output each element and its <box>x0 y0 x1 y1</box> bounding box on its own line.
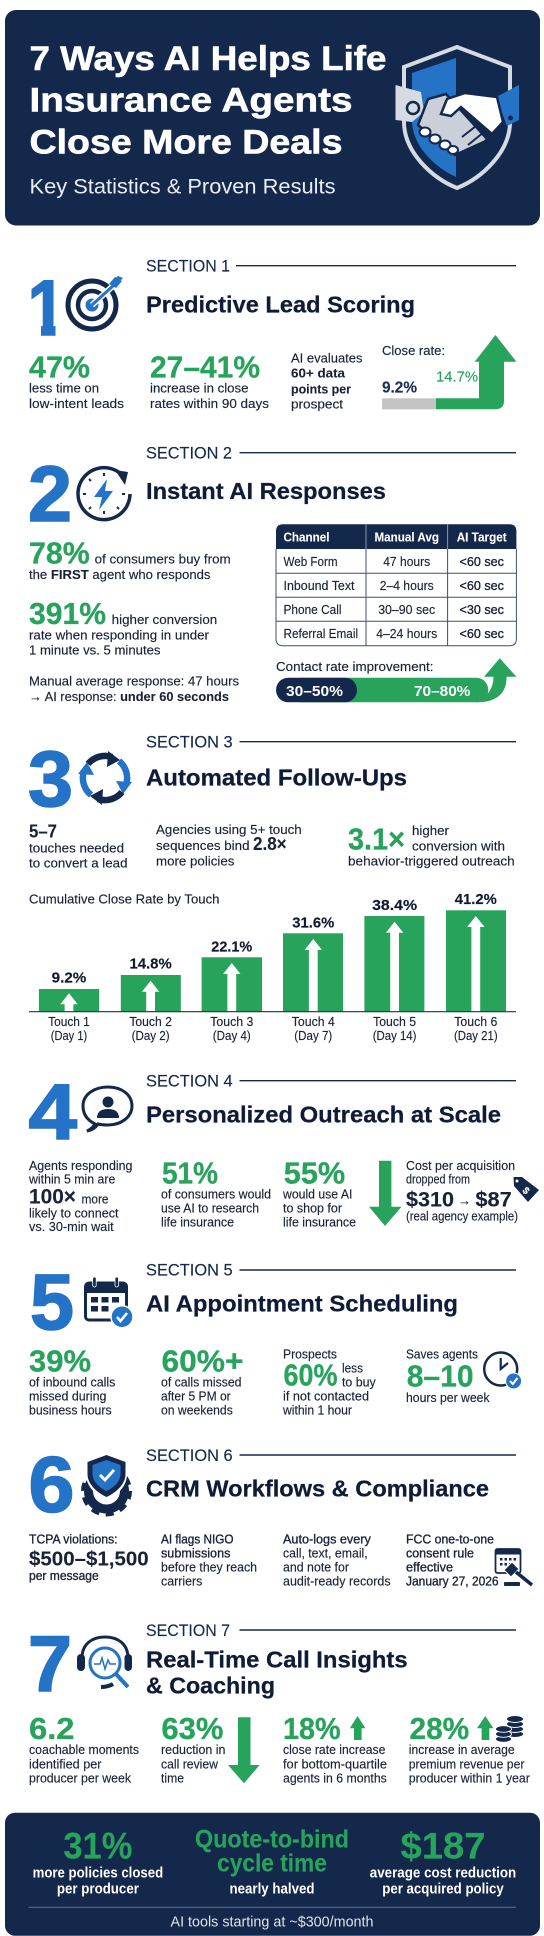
stat: data points: prospect <box>291 397 343 412</box>
section 5: AI appointment scheduling <box>29 1257 522 1418</box>
stat: 100x <box>28 1158 132 1234</box>
section 2: instant AI responses <box>28 443 516 704</box>
icon: calendar and gavel <box>496 1549 532 1586</box>
stat: 3.1x conversion <box>348 821 515 869</box>
stat: 47%: low-intent leads <box>29 396 124 411</box>
icon: headset with magnifier <box>77 1637 132 1687</box>
icon: coin stacks <box>496 1716 524 1742</box>
stat: $187: average cost reduction <box>370 1865 516 1881</box>
stat: 60% less: 60% <box>284 1358 338 1393</box>
text: FCC rule: effective <box>406 1559 453 1574</box>
stat: 391%: rate when responding in under <box>29 627 210 642</box>
bar chart: cumulative close rate by touch: Touch 1 <box>48 1014 90 1029</box>
stat: 51%: of consumers would <box>161 1187 271 1202</box>
stat: 27-41%: rates within 90 days <box>150 396 269 411</box>
stat: cost per acquisition <box>406 1158 518 1224</box>
bar chart: cumulative close rate by touch: (Day 4) <box>213 1028 251 1043</box>
stat: 60%+: 60%+ <box>162 1344 244 1379</box>
stat: 28%: 28% <box>410 1711 469 1746</box>
stat: 51%: life insurance <box>161 1214 234 1229</box>
stat: 391%: 1 minute vs. 5 minutes <box>29 643 161 658</box>
table: channel response times: AI Target <box>457 530 507 545</box>
stat: TCPA violations: $500–$1,500 <box>29 1549 149 1571</box>
heading: Personalized Outreach at Scale <box>146 1102 501 1128</box>
table: channel response times: <60 sec <box>460 626 504 641</box>
stat: 55%: 55% <box>284 1155 345 1190</box>
heading: AI Appointment Scheduling <box>146 1291 458 1317</box>
stat: 60%+: of calls missed <box>161 1375 242 1390</box>
stat: 100x: more <box>82 1191 108 1206</box>
table: channel response times: Channel <box>284 530 330 545</box>
stat: 391%: 391% <box>29 596 106 631</box>
stat: 39%: of inbound calls <box>29 1375 116 1390</box>
text: NIGO flags: AI flags NIGO <box>161 1531 234 1546</box>
section number: 4 <box>28 1067 77 1156</box>
stat: 60% less: if not contacted <box>283 1389 369 1404</box>
stat: 2.8x policies: Agencies using 5+ touch <box>156 822 302 837</box>
stat: 2.8x policies: 2.8× <box>253 834 287 854</box>
icon: price tag: $ <box>520 1185 532 1197</box>
stat: 78%: of consumers buy from <box>95 551 231 566</box>
table: channel response times: <30 sec <box>460 602 504 617</box>
stat: 3.1x conversion: behavior-triggered outreach <box>348 854 515 869</box>
section 7: real-time call insights and coaching <box>28 1619 530 1786</box>
stat: cost per acquisition: → <box>458 1193 471 1208</box>
chart: contact rate improvement: Contact rate improvement: <box>276 659 434 674</box>
stat: TCPA violations: TCPA violations: <box>29 1531 118 1546</box>
stat: TCPA violations: per message <box>29 1568 99 1583</box>
bar chart: cumulative close rate by touch: Touch 4 <box>292 1014 335 1029</box>
text: NIGO flags: before they reach <box>161 1559 257 1574</box>
stat: 60%+: after 5 PM or <box>161 1389 231 1404</box>
text: FCC rule: January 27, 2026 <box>406 1573 499 1588</box>
table: channel response times <box>276 524 516 646</box>
bar chart: cumulative close rate by touch <box>29 891 516 1043</box>
bar chart: cumulative close rate by touch: (Day 14) <box>373 1028 416 1043</box>
stat: 31% more policies: per producer <box>57 1881 139 1897</box>
stat: 6.2 <box>29 1711 139 1786</box>
section 3: automated follow-ups <box>28 732 516 1043</box>
heading: CRM Workflows & Compliance <box>146 1476 489 1502</box>
stat: 100x: vs. 30-min wait <box>29 1219 114 1234</box>
stat: 39%: 39% <box>29 1344 91 1379</box>
table: channel response times: <60 sec <box>460 578 504 593</box>
stat: 6.2: producer per week <box>29 1771 131 1786</box>
arrow: review time down <box>228 1717 260 1783</box>
stat: 63%: call review <box>161 1756 218 1771</box>
bar chart: cumulative close rate by touch: (Day 7) <box>294 1028 332 1043</box>
text: response comparison: → AI response: under 60 seconds <box>29 689 229 704</box>
table: channel response times: Web Form <box>284 554 338 569</box>
section label: SECTION 4 <box>146 1072 233 1091</box>
stat: 391% <box>29 596 217 658</box>
bar chart: cumulative close rate by touch: 14.8% <box>129 956 172 973</box>
table: channel response times: 47 hours <box>383 554 431 569</box>
stat: data points: points per <box>291 381 351 396</box>
stat: 63%: 63% <box>161 1711 223 1746</box>
stat: 60% less: within 1 hour <box>282 1403 353 1418</box>
bar chart: cumulative close rate by touch: Touch 6 <box>454 1014 497 1029</box>
stat: 51%: 51% <box>162 1155 218 1190</box>
icon: circular arrows <box>78 751 132 805</box>
stat: 5-7 touches: to convert a lead <box>29 856 128 871</box>
icon: price tag <box>514 1177 539 1202</box>
stat: 18%: agents in 6 months <box>283 1771 387 1786</box>
stat: 5-7 touches <box>29 821 128 871</box>
arrow: cost down <box>369 1161 402 1226</box>
section label: SECTION 6 <box>146 1446 233 1465</box>
stat: 39% <box>29 1344 116 1418</box>
chart: contact rate improvement <box>276 658 516 702</box>
table: channel response times: 30–90 sec <box>378 602 436 617</box>
text: response comparison: Manual average response: 47 hours <box>29 674 239 689</box>
stat: 51%: use AI to research <box>161 1201 259 1216</box>
stat: 8-10 hours: hours per week <box>406 1390 490 1405</box>
stat: 60% less: Prospects <box>283 1347 337 1362</box>
stat: 47%: 47% <box>29 349 90 384</box>
stat: 60% less: to buy <box>342 1375 376 1390</box>
stat: 28%: producer within 1 year <box>409 1771 530 1786</box>
stat: data points: 60+ data <box>291 366 346 381</box>
stat: 55%: life insurance <box>283 1214 356 1229</box>
stat: 60%+ <box>161 1344 244 1418</box>
section 6: CRM workflows and compliance <box>28 1440 532 1588</box>
stat: 5-7 touches: touches needed <box>29 840 124 855</box>
stat: data points <box>291 350 363 412</box>
section number: 6 <box>28 1440 74 1528</box>
table: channel response times: Manual Avg <box>374 530 439 545</box>
stat: 18%: for bottom-quartile <box>283 1756 387 1771</box>
stat: 18%: 18% <box>283 1711 341 1746</box>
panel: summary footer <box>5 1813 540 1936</box>
text: response comparison <box>29 674 239 704</box>
stat: cost per acquisition: $310 <box>406 1189 454 1212</box>
stat: 78% <box>29 535 231 582</box>
text: auto-logs: audit-ready records <box>283 1573 391 1588</box>
stat: 18% <box>283 1711 387 1786</box>
stat: 47%: less time on <box>29 381 99 396</box>
section number: 1 <box>28 263 66 352</box>
text: auto-logs: and note for <box>283 1559 350 1574</box>
stat: 51% <box>161 1155 271 1229</box>
chart: close rate arrow: 14.7% <box>436 369 478 386</box>
bar chart: cumulative close rate by touch: 38.4% <box>372 897 417 914</box>
section label: SECTION 7 <box>146 1621 230 1640</box>
stat: 27-41%: 27–41% <box>150 349 260 384</box>
stat: 391%: higher conversion <box>112 612 217 627</box>
stat: 8-10 hours <box>406 1347 490 1405</box>
stat: 3.1x conversion: higher <box>412 823 450 838</box>
stat: cost per acquisition: (real agency example) <box>406 1209 518 1224</box>
stat: 60% less <box>282 1347 376 1418</box>
chart: close rate arrow <box>382 335 516 409</box>
stat: 55% <box>282 1155 356 1229</box>
icon: calendar with check <box>86 1277 133 1328</box>
stat: 3.1x conversion: conversion with <box>412 838 505 853</box>
bar chart: cumulative close rate by touch: 9.2% <box>52 970 86 987</box>
stat: 6.2: coachable moments <box>29 1742 139 1757</box>
icon: clock with lightning <box>78 468 130 520</box>
stat: 3.1x conversion: 3.1× <box>348 821 405 856</box>
text: NIGO flags: submissions <box>161 1545 231 1560</box>
stat: 8-10 hours: 8–10 <box>407 1359 474 1394</box>
table: channel response times: Inbound Text <box>284 578 355 593</box>
stat: 60%+: on weekends <box>161 1403 233 1418</box>
bar chart: cumulative close rate by touch: (Day 2) <box>132 1028 170 1043</box>
bar chart: cumulative close rate by touch: (Day 1) <box>51 1028 87 1043</box>
chart: contact rate improvement: 70–80% <box>414 683 470 700</box>
bar chart: cumulative close rate by touch: 22.1% <box>211 938 252 955</box>
stat: 27-41% <box>150 349 269 411</box>
table: channel response times: 4–24 hours <box>376 626 438 641</box>
stat: 63%: reduction in <box>161 1742 226 1757</box>
table: channel response times: 2–4 hours <box>380 578 434 593</box>
stat: 63%: time <box>161 1771 184 1786</box>
stat: quote-to-bind: cycle time <box>217 1850 327 1878</box>
stat: cost per acquisition: Cost per acquisition <box>406 1158 515 1173</box>
stat: cost per acquisition: dropped from <box>406 1171 470 1186</box>
table: channel response times: Phone Call <box>284 602 342 617</box>
stat: 47% <box>29 349 124 411</box>
stat: data points: AI evaluates <box>291 350 363 365</box>
chart: contact rate improvement: 30–50% <box>286 683 343 700</box>
stat: 31% more policies: more policies closed <box>33 1865 163 1881</box>
panel: header banner <box>5 10 540 226</box>
stat: 6.2: identified per <box>29 1756 102 1771</box>
bar chart: cumulative close rate by touch: Touch 2 <box>129 1014 172 1029</box>
stat: 27-41%: increase in close <box>150 381 248 396</box>
stat: 55%: to shop for <box>283 1201 343 1216</box>
section number: 5 <box>30 1257 74 1346</box>
bar chart: cumulative close rate by touch: 31.6% <box>292 914 334 931</box>
table: channel response times: <60 sec <box>460 554 504 569</box>
stat: 100x: within 5 min are <box>28 1171 115 1186</box>
stat: 100x: likely to connect <box>29 1205 119 1220</box>
text: FCC rule: FCC one-to-one <box>406 1531 494 1546</box>
section number: 2 <box>28 449 72 538</box>
section 4: personalized outreach at scale <box>28 1067 539 1234</box>
section 1: predictive lead scoring <box>28 257 516 412</box>
bar chart: cumulative close rate by touch: Cumulative Close Rate by Touch <box>29 892 220 907</box>
stat: TCPA violations <box>29 1531 149 1583</box>
text: NIGO flags <box>161 1531 257 1588</box>
icon: shield and gear <box>84 1452 130 1514</box>
stat: 28%: premium revenue per <box>409 1756 525 1771</box>
heading: Real-Time Call Insights <box>146 1646 408 1672</box>
text: FCC rule: consent rule <box>406 1545 474 1560</box>
stat: 100x: Agents responding <box>29 1158 132 1173</box>
stat: 5-7 touches: 5–7 <box>29 821 57 841</box>
text: auto-logs: Auto-logs every <box>283 1531 371 1546</box>
stat: 78%: the FIRST agent who responds <box>29 567 211 582</box>
section label: SECTION 1 <box>146 257 230 276</box>
title: 7 Ways AI Helps Life <box>30 40 386 78</box>
stat: 18%: close rate increase <box>283 1742 385 1757</box>
stat: 6.2: 6.2 <box>29 1711 74 1746</box>
stat: 2.8x policies <box>156 822 302 868</box>
stat: cost per acquisition: $87 <box>475 1189 512 1212</box>
heading: Instant AI Responses <box>146 478 386 504</box>
heading: & Coaching <box>146 1672 275 1698</box>
chart: close rate arrow: 9.2% <box>382 380 417 397</box>
subtitle: Key Statistics & Proven Results <box>30 175 336 198</box>
section label: SECTION 5 <box>146 1261 233 1280</box>
icon: shield with handshake <box>396 47 519 188</box>
bar chart: cumulative close rate by touch: Touch 5 <box>373 1014 416 1029</box>
icon: speech bubble with person <box>83 1087 132 1131</box>
section label: SECTION 3 <box>146 732 233 751</box>
stat: 55%: would use AI <box>282 1187 352 1202</box>
stat: 63% <box>161 1711 226 1786</box>
stat: 39%: missed during <box>29 1389 106 1404</box>
stat: $187 <box>370 1825 516 1897</box>
stat: 28%: increase in average <box>409 1742 515 1757</box>
title <box>30 40 386 161</box>
bar chart: cumulative close rate by touch: 41.2% <box>455 891 497 908</box>
stat: 2.8x policies: more policies <box>156 853 235 868</box>
title: Insurance Agents <box>30 82 352 120</box>
stat: 2.8x policies: sequences bind <box>156 838 250 853</box>
stat: quote-to-bind: Quote-to-bind <box>195 1825 349 1853</box>
stat: 60% less: less <box>342 1361 363 1376</box>
heading <box>146 1646 408 1698</box>
stat: $187: per acquired policy <box>382 1881 504 1897</box>
stat: 28% <box>409 1711 530 1786</box>
icon: target with arrow <box>68 276 123 329</box>
text: auto-logs: call, text, email, <box>283 1545 368 1560</box>
chart: close rate arrow: Close rate: <box>382 343 445 358</box>
section label: SECTION 2 <box>146 443 232 462</box>
text: FCC rule <box>406 1531 499 1588</box>
section number: 7 <box>28 1619 72 1708</box>
text: auto-logs <box>283 1531 391 1588</box>
heading: Predictive Lead Scoring <box>146 291 415 317</box>
stat: quote-to-bind: nearly halved <box>230 1881 314 1897</box>
text: NIGO flags: carriers <box>161 1573 203 1588</box>
text: pricing note: AI tools starting at ~$300/month <box>170 1915 374 1931</box>
bar chart: cumulative close rate by touch: Touch 3 <box>210 1014 253 1029</box>
stat: 39%: business hours <box>29 1403 112 1418</box>
stat: 31% more policies <box>33 1825 163 1897</box>
icon: clock with check <box>484 1352 522 1389</box>
bar chart: cumulative close rate by touch: (Day 21) <box>454 1028 498 1043</box>
title: Close More Deals <box>30 123 342 161</box>
stat: 100x: 100× <box>29 1185 76 1208</box>
stat: 8-10 hours: Saves agents <box>406 1347 478 1362</box>
section number: 3 <box>28 734 73 823</box>
stat: 31% more policies: 31% <box>63 1825 132 1866</box>
stat: quote-to-bind <box>195 1825 349 1897</box>
heading: Automated Follow-Ups <box>146 765 407 791</box>
table: channel response times: Referral Email <box>284 626 358 641</box>
stat: $187: $187 <box>400 1825 486 1866</box>
stat: 78%: 78% <box>29 535 90 570</box>
